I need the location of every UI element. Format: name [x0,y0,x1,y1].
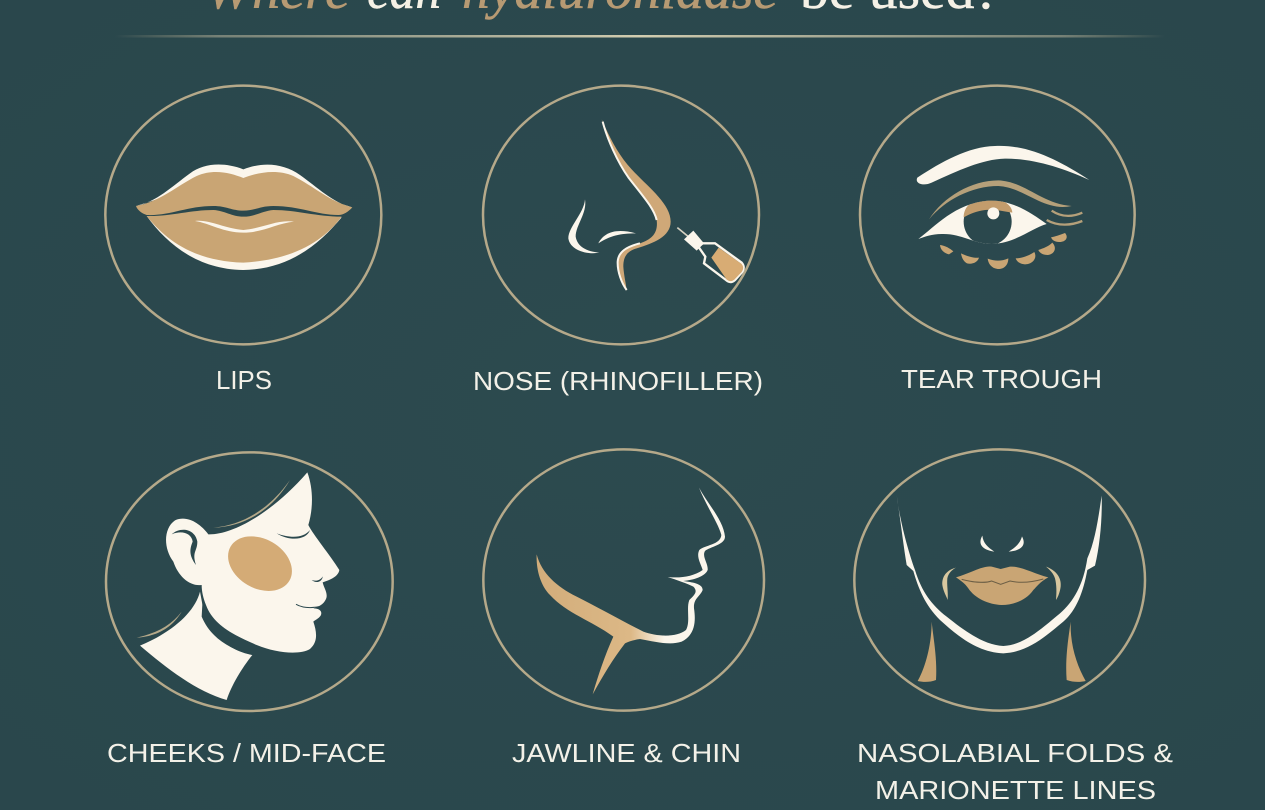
icon: nose with syringe [483,86,759,344]
label: lips: LIPS [216,367,272,395]
icon: eye [860,86,1135,344]
label: tear trough: TEAR TROUGH [901,366,1102,394]
icon: face profile with cheek [106,452,393,711]
panel: lips [105,86,381,395]
label: nasolabial folds line 1: NASOLABIAL FOLDS & [857,740,1173,768]
label: cheeks: CHEEKS / MID-FACE [107,740,386,768]
title rule [115,35,1165,38]
panel: nose [473,86,763,396]
icon: lower face [854,449,1145,711]
label: nasolabial folds line 2: MARIONETTE LINES [875,777,1156,805]
panel: tear trough [860,86,1135,394]
label: nose: NOSE (RHINOFILLER) [473,368,763,396]
title [205,0,1000,20]
icon: jawline profile [483,449,764,711]
panel: nasolabial folds [854,449,1173,805]
panel: jawline [483,449,764,768]
label: jawline: JAWLINE & CHIN [512,740,741,768]
icon: lips [105,86,381,344]
panel: cheeks [106,452,393,768]
